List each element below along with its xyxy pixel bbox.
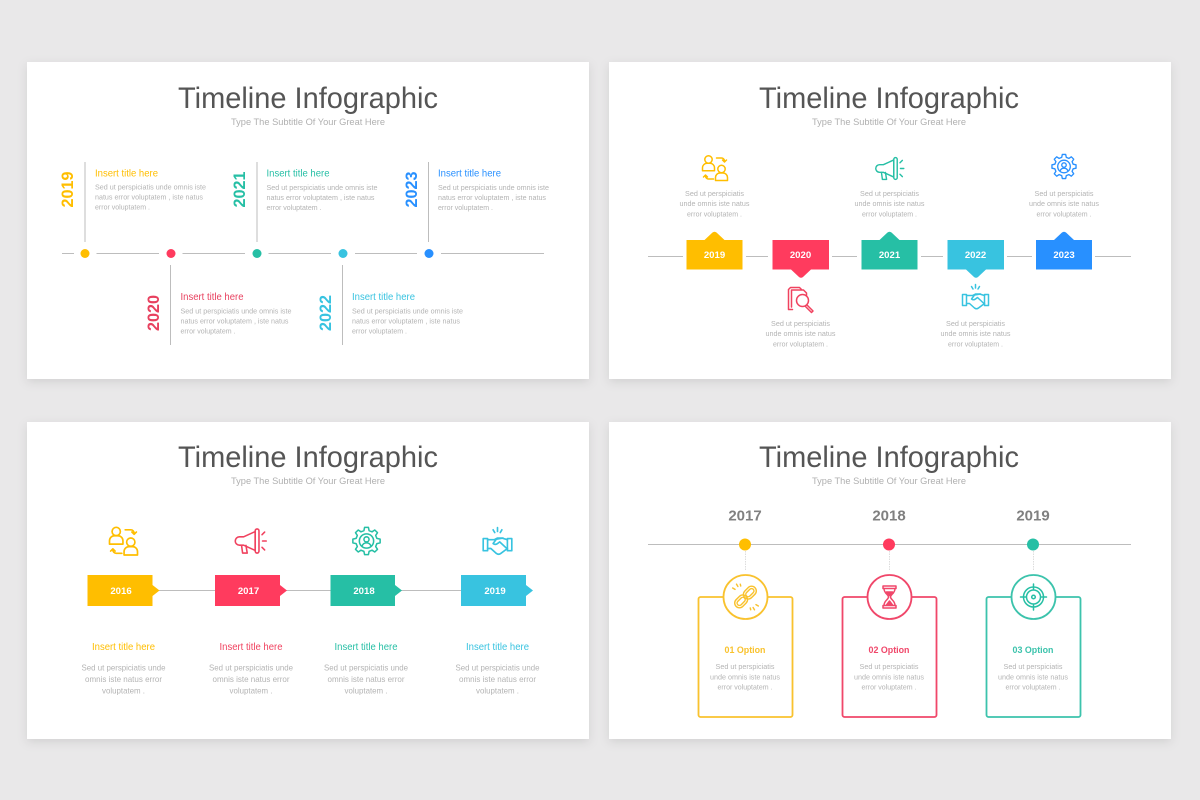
card 2017: error voluptatem .	[718, 682, 772, 692]
milestone 2023: natus error voluptatem , iste natus	[438, 193, 546, 202]
milestone 2020: Sed ut perspiciatis unde omnis iste	[180, 306, 292, 316]
step 2019: 2019	[484, 586, 506, 597]
step 2022: error voluptatem .	[948, 340, 1003, 348]
step 2019	[680, 156, 750, 270]
step 2019	[456, 528, 540, 696]
card 2017: Sed ut perspiciatis	[716, 662, 775, 671]
milestone 2021: error voluptatem .	[266, 203, 322, 212]
step 2022: Sed ut perspiciatis	[946, 319, 1005, 328]
step 2017	[209, 529, 293, 696]
step 2018	[324, 527, 408, 696]
panel: arrow box timeline 2016-2019	[27, 422, 589, 739]
milestone 2020: Insert title here	[180, 292, 244, 303]
panel: dot timeline 2019-2023	[27, 62, 589, 379]
milestone 2021: natus error voluptatem , iste natus	[266, 193, 375, 202]
step 2019: unde omnis iste natus	[680, 199, 750, 208]
step 2019: Sed ut perspiciatis unde	[456, 662, 540, 672]
step 2017: voluptatem .	[230, 686, 272, 696]
step 2017: omnis iste natus error	[212, 674, 290, 684]
panel 3 title: Timeline Infographic	[178, 441, 438, 474]
milestone 2020: 2020	[144, 295, 163, 331]
step 2021: 2021	[879, 250, 901, 261]
step 2018: voluptatem .	[344, 686, 388, 696]
step 2017: Sed ut perspiciatis unde	[209, 662, 293, 672]
milestone 2019: Sed ut perspiciatis unde omnis iste	[95, 182, 206, 192]
panel 1 title: Timeline Infographic	[178, 82, 438, 115]
panel: flag timeline 2019-2023	[609, 62, 1171, 379]
step 2017: Insert title here	[220, 642, 283, 653]
step 2019: voluptatem .	[476, 686, 519, 696]
step 2019: 2019	[704, 250, 725, 261]
step 2021: unde omnis iste natus	[854, 199, 925, 208]
panel: option cards timeline 2017-2019	[609, 422, 1171, 739]
panel 4 subtitle: Type The Subtitle Of Your Great Here	[812, 476, 966, 487]
step 2018: Sed ut perspiciatis unde	[324, 662, 408, 672]
step 2018: Insert title here	[334, 642, 398, 653]
milestone 2023: Insert title here	[438, 168, 501, 180]
card 2019: unde omnis iste natus	[998, 672, 1068, 682]
step 2022	[940, 240, 1011, 348]
panel 2 subtitle: Type The Subtitle Of Your Great Here	[812, 117, 966, 128]
card 2018	[842, 508, 936, 717]
step 2017: 2017	[238, 586, 259, 597]
step 2019: error voluptatem .	[687, 210, 742, 218]
step 2023: unde omnis iste natus	[1029, 199, 1099, 208]
milestone 2023: 2023	[402, 172, 421, 208]
step 2021: error voluptatem .	[862, 210, 917, 218]
panel 3 subtitle: Type The Subtitle Of Your Great Here	[231, 476, 385, 487]
milestone 2022: natus error voluptatem , iste natus	[352, 316, 460, 326]
milestone 2022: Insert title here	[352, 292, 415, 303]
milestone 2019: Insert title here	[95, 168, 158, 180]
milestone 2021: Insert title here	[266, 168, 330, 180]
step 2016: omnis iste natus error	[85, 674, 162, 684]
step 2021: Sed ut perspiciatis	[860, 189, 919, 198]
milestone 2023	[402, 162, 549, 258]
card 2019: 03 Option	[1012, 645, 1054, 656]
panel 2 title: Timeline Infographic	[759, 82, 1019, 115]
milestone 2021: 2021	[230, 172, 249, 208]
milestone 2020	[144, 249, 292, 345]
step 2020: Sed ut perspiciatis	[771, 319, 830, 328]
milestone 2022: Sed ut perspiciatis unde omnis iste	[352, 306, 463, 316]
milestone 2020: error voluptatem .	[180, 326, 236, 336]
milestone 2023: Sed ut perspiciatis unde omnis iste	[438, 183, 549, 192]
card 2019: error voluptatem .	[1006, 682, 1060, 692]
milestone 2019	[58, 162, 206, 258]
step 2016: Insert title here	[92, 642, 155, 653]
card 2017	[698, 508, 792, 717]
milestone 2022: 2022	[316, 295, 335, 331]
step 2023: 2023	[1053, 250, 1075, 261]
step 2022: 2022	[965, 250, 986, 261]
card 2018: unde omnis iste natus	[854, 672, 924, 682]
step 2023	[1029, 154, 1099, 270]
step 2021	[854, 158, 925, 270]
step 2016	[82, 527, 166, 696]
panel 4 title: Timeline Infographic	[759, 441, 1019, 474]
card 2017: 01 Option	[724, 645, 766, 656]
milestone 2019: error voluptatem .	[95, 202, 150, 212]
step 2018: omnis iste natus error	[328, 674, 405, 684]
step 2016: Sed ut perspiciatis unde	[82, 662, 166, 672]
step 2016: 2016	[110, 586, 132, 597]
step 2023: Sed ut perspiciatis	[1034, 189, 1094, 198]
milestone 2022	[316, 249, 463, 345]
step 2020: error voluptatem .	[773, 340, 828, 348]
panel 1 subtitle: Type The Subtitle Of Your Great Here	[231, 117, 385, 128]
card 2018: error voluptatem .	[862, 682, 916, 692]
milestone 2023: error voluptatem .	[438, 203, 493, 212]
card 2019	[986, 508, 1080, 717]
card 2018: 02 Option	[868, 645, 910, 656]
milestone 2022: error voluptatem .	[352, 326, 407, 336]
step 2018: 2018	[353, 586, 375, 597]
step 2020: 2020	[790, 250, 811, 261]
step 2022: unde omnis iste natus	[940, 329, 1011, 338]
card 2017: unde omnis iste natus	[710, 672, 780, 682]
card 2018: Sed ut perspiciatis	[860, 662, 919, 671]
milestone 2019: natus error voluptatem , iste natus	[95, 192, 203, 202]
step 2016: voluptatem .	[102, 686, 145, 696]
step 2019: Insert title here	[466, 642, 529, 653]
card 2019: 2019	[1016, 508, 1050, 524]
step 2020	[766, 240, 836, 348]
milestone 2020: natus error voluptatem , iste natus	[180, 316, 289, 326]
milestone 2021: Sed ut perspiciatis unde omnis iste	[266, 183, 378, 192]
card 2019: Sed ut perspiciatis	[1004, 662, 1063, 671]
step 2020: unde omnis iste natus	[766, 329, 836, 338]
step 2023: error voluptatem .	[1036, 210, 1092, 218]
milestone 2021	[230, 162, 378, 258]
card 2017: 2017	[728, 508, 762, 524]
card 2018: 2018	[872, 508, 906, 524]
step 2019: omnis iste natus error	[459, 674, 536, 684]
milestone 2019: 2019	[58, 172, 77, 208]
step 2019: Sed ut perspiciatis	[685, 189, 744, 198]
